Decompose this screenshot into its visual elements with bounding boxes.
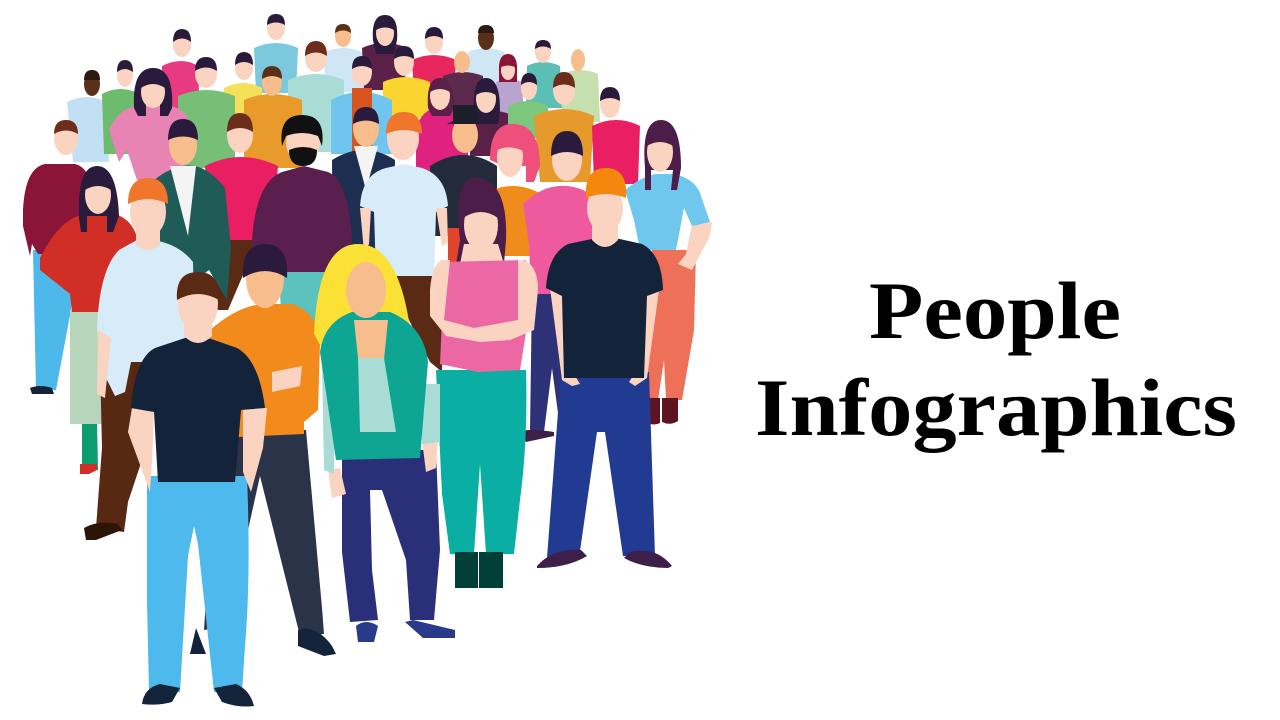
person: back row pink shirt (162, 29, 200, 116)
person: back row light blue shirt (254, 14, 298, 93)
person: red shirt visible behind pink top woman (448, 228, 482, 264)
person: back row maroon shirt (441, 51, 485, 116)
illustration: crowd of people (23, 14, 712, 706)
person: pale teal shirt (288, 41, 344, 152)
person: woman in blue top and coral trousers (625, 120, 712, 424)
person: dark purple woman centre right (470, 78, 515, 156)
person: woman in pink top with crossed arms (430, 178, 538, 588)
person: back row dark purple woman (362, 15, 408, 90)
person: back row dark skinned man (466, 25, 506, 92)
person: green shirt left (102, 60, 140, 154)
person: dark green jacket man (145, 119, 231, 300)
person: brown trousers behind pale blue man (395, 272, 445, 372)
person: back row lavender woman (496, 54, 524, 118)
person: orange shirt left (244, 66, 302, 168)
person: pink shirt far right (592, 87, 640, 184)
person: orange shirt right (534, 72, 594, 182)
person: back row red shirt (412, 27, 456, 95)
person: maroon shirt with blue trousers (23, 120, 91, 394)
person: green shirt right (508, 73, 548, 138)
title: People (869, 265, 1121, 356)
person: dark shirt man with hat (430, 105, 497, 236)
person: pink shirt man with navy trousers (518, 131, 601, 442)
person: magenta woman (416, 78, 468, 174)
person: back row pale green shirt (562, 49, 600, 122)
person: yellow shirt right (383, 46, 430, 118)
person: back row teal shirt (526, 40, 562, 108)
person: teal trousers under purple sweater (278, 268, 336, 322)
title line two: Infographics (755, 362, 1237, 453)
person: purple sweater man with beard (252, 115, 352, 272)
person: front right man in black shirt with blue jeans (537, 168, 672, 568)
person: pink woman (109, 68, 191, 180)
person: green shirt centre (178, 57, 235, 168)
person: pale blue shirt man with orange hair (360, 112, 448, 276)
person: dark skinned man in pale blue (67, 70, 109, 162)
person: orange shirt man with dark trousers (190, 244, 336, 656)
person: pale blue shirt man with brown trousers (84, 178, 195, 540)
person: yellow shirt (224, 52, 262, 124)
person: blue jacket with orange shirt (331, 56, 392, 154)
person: blonde woman in teal jacket (314, 244, 455, 642)
person: back row pale blue shirt (324, 24, 364, 92)
person: front man in black shirt with light blue jeans (128, 272, 267, 706)
person: pink shirt man behind (205, 113, 278, 310)
person: woman in red top and pale skirt (40, 166, 137, 474)
person: navy jacket man (332, 107, 395, 278)
person: orange top woman with pink hair (482, 124, 545, 256)
